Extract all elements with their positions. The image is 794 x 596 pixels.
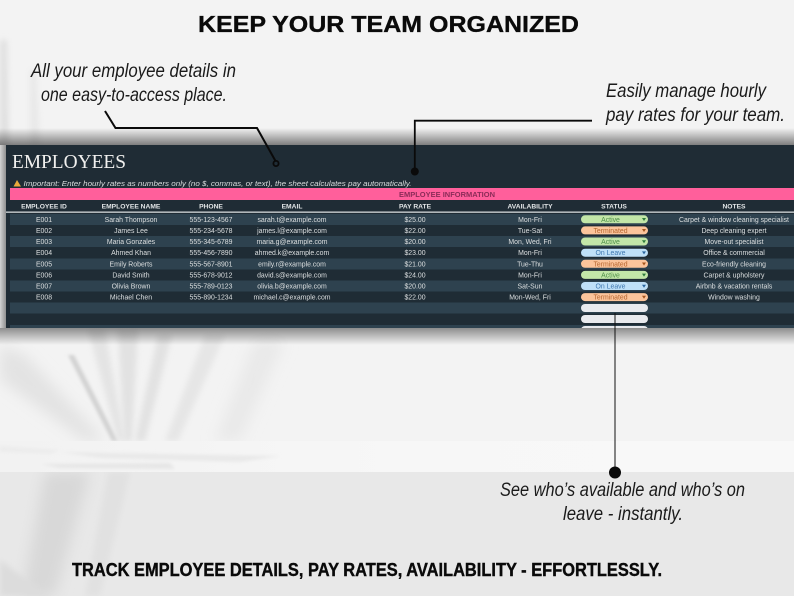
row E005: Emily Roberts <box>110 261 153 268</box>
row E008: Michael Chen <box>110 295 152 302</box>
row E007: E007 <box>36 284 52 290</box>
status pills: Active <box>601 239 620 246</box>
warning note: Important: Enter hourly rates as numbers only (no $, commas, or text), the sheet calculates pay automatically. <box>24 179 412 188</box>
callout: availability: leave - instantly. <box>563 504 683 525</box>
row E002: E002 <box>36 228 52 235</box>
row E003: $20.00 <box>404 239 426 246</box>
status pills <box>581 215 648 334</box>
row E007 <box>36 284 773 290</box>
row E006: Carpet & upholstery <box>704 272 765 279</box>
title: KEEP YOUR TEAM ORGANIZED <box>198 11 579 37</box>
row E001: sarah.t@example.com <box>257 217 327 224</box>
row E001: Sarah Thompson <box>105 217 158 224</box>
row E008: Mon-Wed, Fri <box>509 295 551 302</box>
row E003: maria.g@example.com <box>257 239 328 246</box>
arrow: pay rates <box>411 121 592 176</box>
row E005: Eco-friendly cleaning <box>702 261 766 268</box>
status pills: On Leave <box>596 284 626 290</box>
row E001 <box>36 217 789 224</box>
column headers: NOTES <box>722 204 746 210</box>
row E001: Mon-Fri <box>518 217 542 224</box>
row E004: Mon-Fri <box>518 250 542 257</box>
row E003: 555-345-6789 <box>190 239 233 246</box>
status pills: Terminated <box>593 228 628 235</box>
row E005 <box>36 261 766 268</box>
row E008 <box>36 295 760 302</box>
row E002: 555-234-5678 <box>190 228 233 235</box>
footer tagline: TRACK EMPLOYEE DETAILS, PAY RATES, AVAILABILITY - EFFORTLESSLY. <box>72 560 662 580</box>
row E006: $24.00 <box>404 272 426 279</box>
row E008: 555-890-1234 <box>190 295 233 302</box>
row E006: 555-678-9012 <box>190 272 233 279</box>
row E002: james.l@example.com <box>256 228 327 235</box>
row E003 <box>36 239 764 246</box>
row E007: olivia.b@example.com <box>257 284 327 290</box>
row E003: Maria Gonzales <box>107 239 156 246</box>
row E001: Carpet & window cleaning specialist <box>679 217 789 224</box>
row E003: E003 <box>36 239 52 246</box>
callout: pay rates <box>605 81 785 126</box>
row E007: 555-789-0123 <box>190 284 233 290</box>
row E006: david.s@example.com <box>257 272 327 279</box>
row E004: $23.00 <box>404 250 426 257</box>
row E005: $21.00 <box>404 261 426 268</box>
row E001: 555-123-4567 <box>190 217 233 224</box>
sheet heading: EMPLOYEES <box>12 151 126 173</box>
row E007: $20.00 <box>404 284 426 290</box>
row E004: 555-456-7890 <box>190 250 233 257</box>
row E005: 555-567-8901 <box>190 261 233 268</box>
row E005: Tue-Thu <box>517 261 543 268</box>
row E003: Move-out specialist <box>705 239 764 246</box>
row E002: Tue-Sat <box>518 228 542 235</box>
arrow: employee details <box>105 111 279 166</box>
status pills: On Leave <box>596 250 626 257</box>
row E008: E008 <box>36 295 52 302</box>
status pills: Active <box>601 272 620 279</box>
column headers: EMPLOYEE ID <box>21 204 67 210</box>
row E004: Office & commercial <box>703 250 765 257</box>
column headers: PHONE <box>199 204 223 210</box>
row E004 <box>36 250 765 257</box>
row E006 <box>36 272 765 279</box>
row E007: Airbnb & vacation rentals <box>696 284 773 290</box>
row E007: Sat-Sun <box>518 284 543 290</box>
callout: employee details: one easy-to-access place. <box>41 85 227 106</box>
column headers: EMPLOYEE NAME <box>102 204 161 210</box>
column headers <box>6 204 794 213</box>
panel shadow <box>0 128 794 345</box>
row E004: E004 <box>36 250 52 257</box>
row E002: Deep cleaning expert <box>701 228 767 235</box>
row E005: E005 <box>36 261 52 268</box>
row E006: David Smith <box>112 272 150 279</box>
row E002 <box>36 228 767 235</box>
row E008: Window washing <box>708 295 760 302</box>
callout: availability <box>500 480 745 525</box>
callout: availability: See who’s available and who’s on <box>500 480 745 501</box>
row E008: $22.00 <box>404 295 426 302</box>
status pills: Active <box>601 217 620 224</box>
row E002: $22.00 <box>404 228 426 235</box>
row E001: E001 <box>36 217 52 224</box>
callout: employee details <box>30 61 236 106</box>
row E006: E006 <box>36 272 52 279</box>
callout: employee details: All your employee details in <box>30 61 236 82</box>
status pills: Terminated <box>593 295 628 302</box>
section banner <box>10 188 794 200</box>
row E006: Mon-Fri <box>518 272 542 279</box>
row E004: ahmed.k@example.com <box>255 250 329 257</box>
row E005: emily.r@example.com <box>258 261 326 268</box>
row E003: Mon, Wed, Fri <box>508 239 552 246</box>
arrow: availability <box>609 313 621 478</box>
row E002: James Lee <box>114 228 148 235</box>
row E007: Olivia Brown <box>112 284 150 290</box>
status pills: Terminated <box>593 261 628 268</box>
column headers: STATUS <box>601 204 627 210</box>
column headers: EMAIL <box>282 204 302 210</box>
employee table panel <box>6 145 794 334</box>
callout: pay rates: Easily manage hourly <box>606 81 767 102</box>
column headers: PAY RATE <box>399 204 432 210</box>
row E004: Ahmed Khan <box>111 250 151 257</box>
row E008: michael.c@example.com <box>253 295 331 302</box>
row E001: $25.00 <box>404 217 426 224</box>
column headers: AVAILABILITY <box>507 204 553 210</box>
row bands <box>10 214 794 328</box>
section banner: EMPLOYEE INFORMATION <box>399 190 495 199</box>
